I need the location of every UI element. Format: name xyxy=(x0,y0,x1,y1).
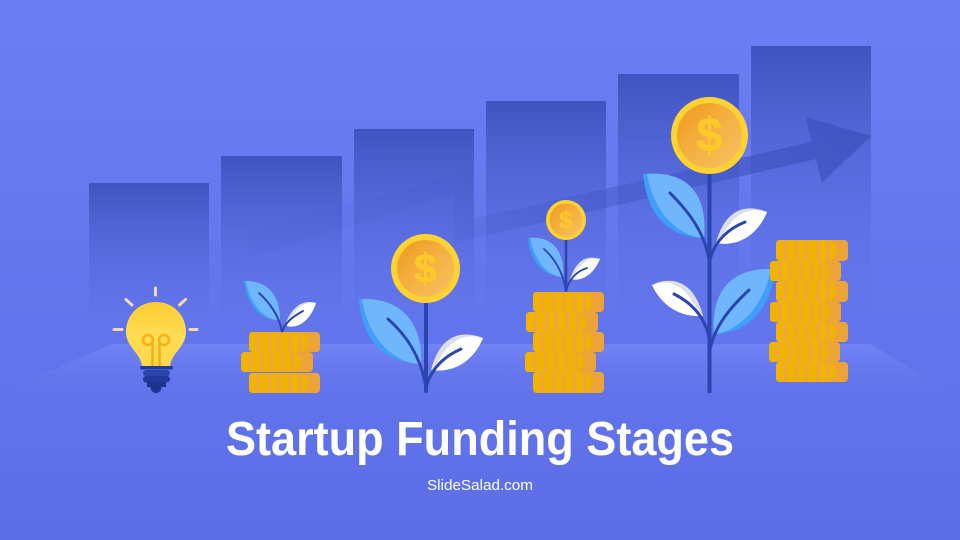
plant 4 with coin: $ xyxy=(696,108,723,161)
bulb rays xyxy=(114,288,197,330)
plant 2 with coin xyxy=(359,234,483,391)
upper white leaf xyxy=(716,208,767,243)
bar chart backdrop xyxy=(89,46,871,345)
plant 1 xyxy=(244,281,316,332)
plant 4 with coin xyxy=(643,97,775,393)
veins xyxy=(670,193,749,352)
lower blue leaf xyxy=(714,269,775,334)
coin stack 2 xyxy=(525,292,604,393)
plant 3 with coin: $ xyxy=(559,207,573,234)
plant 2 with coin: $ xyxy=(415,246,438,292)
gold coin xyxy=(391,234,460,303)
icon: light bulb xyxy=(114,288,197,393)
coin stack 1 xyxy=(241,332,320,393)
white leaf xyxy=(431,334,483,370)
plant 3 with coin xyxy=(528,200,600,292)
lower white leaf xyxy=(652,281,703,316)
growth arrow xyxy=(210,117,871,270)
plant 2 with coin: $ xyxy=(414,246,437,292)
upper blue leaf xyxy=(643,174,704,238)
bulb filament xyxy=(143,335,169,366)
stem and veins xyxy=(424,300,428,391)
bulb glass xyxy=(126,302,186,366)
plant 4 with coin: $ xyxy=(697,108,723,161)
coin stack 3 xyxy=(769,240,848,382)
title: Startup Funding Stages xyxy=(226,413,734,466)
blue leaf xyxy=(359,299,421,364)
gold coin xyxy=(671,97,748,174)
plant 3 with coin: $ xyxy=(560,207,574,234)
bulb base xyxy=(140,366,173,393)
floor platform xyxy=(0,344,960,400)
website credit: SlideSalad.com xyxy=(427,478,533,494)
